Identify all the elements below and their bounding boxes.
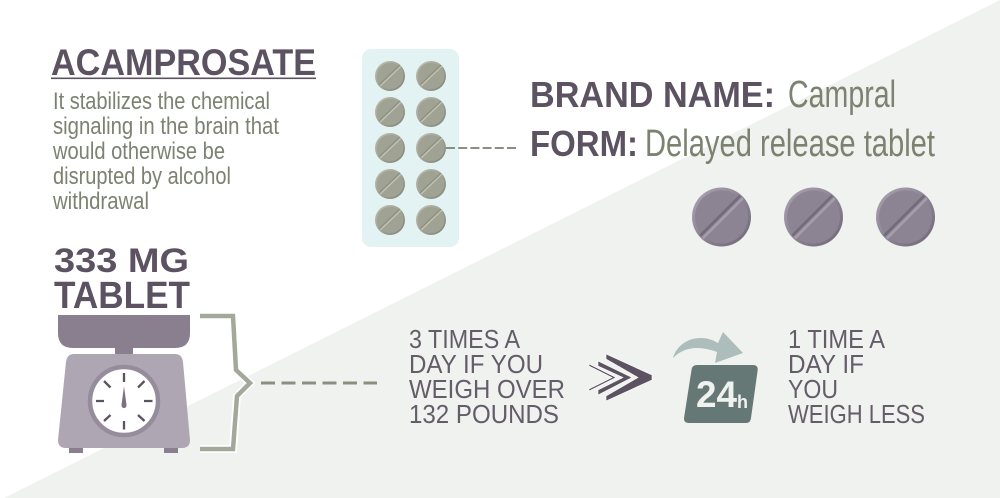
brand name: BRAND NAME: — [530, 74, 775, 115]
bracket — [200, 316, 250, 449]
dose heading: 333 MG tablet: 333 MG — [54, 242, 189, 280]
description text: withdrawal — [52, 188, 149, 215]
dosing text: 1 time a day: YOU — [788, 374, 838, 404]
icon: 24h clock badge: h — [737, 392, 748, 412]
dose heading: 333 MG tablet: TABLET — [54, 275, 190, 317]
icon: triple chevron arrow — [589, 354, 652, 401]
form — [530, 123, 935, 165]
description text — [52, 88, 279, 215]
dosing text: 3 times a day: WEIGH OVER — [409, 374, 565, 404]
dosing text: 3 times a day: 132 POUNDS — [409, 399, 559, 429]
description text: would otherwise be — [52, 138, 225, 165]
description text: disrupted by alcohol — [53, 163, 231, 190]
dashed connector: blister to form — [446, 147, 516, 149]
bracket stroke — [200, 316, 250, 449]
form: FORM: — [530, 123, 638, 164]
icon: 24h clock badge: 24 — [696, 374, 737, 415]
icon: weighing scale — [58, 315, 190, 453]
dashed connector: bracket to dose text — [261, 382, 377, 384]
icon: three tablets — [692, 188, 935, 246]
brand name — [530, 74, 896, 116]
dosing text: 1 time a day: DAY IF — [788, 349, 864, 379]
brand name: Campral — [788, 74, 896, 116]
title: ACAMPROSATE: ACAMPROSATE — [51, 42, 316, 83]
dosing text: 1 time a day — [788, 324, 925, 429]
icon: 24h clock badge — [684, 365, 758, 423]
description text: It stabilizes the chemical — [53, 88, 270, 115]
description text: signaling in the brain that — [53, 113, 279, 140]
dosing text: 3 times a day: 3 TIMES A — [409, 324, 521, 354]
dose heading: 333 MG tablet — [54, 242, 190, 317]
dosing text: 3 times a day: DAY IF YOU — [409, 349, 543, 379]
dosing text: 1 time a day: 1 TIME A — [788, 324, 886, 354]
icon: blister pack — [362, 49, 459, 247]
dosing text: 1 time a day: WEIGH LESS — [788, 399, 925, 429]
icon: curved arrow — [673, 332, 743, 363]
dosing text: 3 times a day — [409, 324, 565, 429]
